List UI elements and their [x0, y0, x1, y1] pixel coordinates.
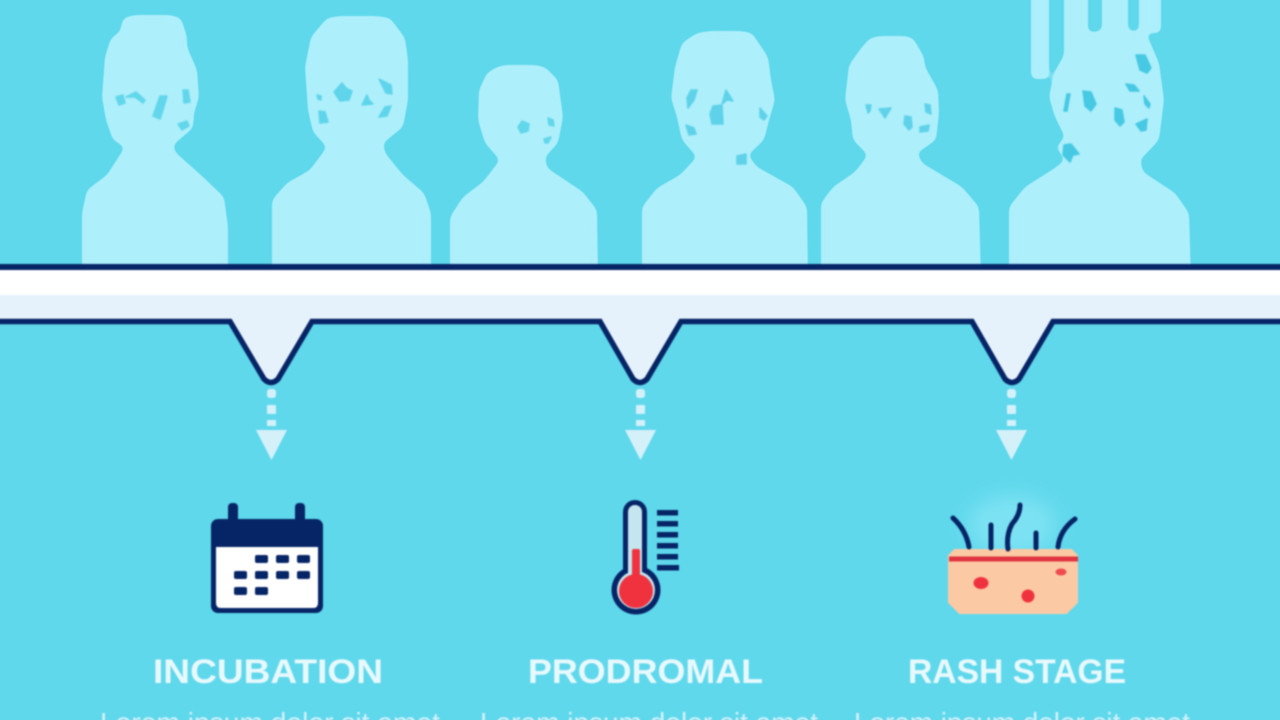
- panel: row of patient silhouettes: [82, 0, 1191, 280]
- heading: prodromal: PRODROMAL: [528, 653, 763, 691]
- timeline band with three notches: [0, 264, 1280, 382]
- icon: thermometer: [612, 500, 679, 614]
- heading: rash stage: RASH STAGE: [908, 653, 1126, 691]
- icon: rash on skin: [949, 495, 1078, 612]
- silhouette: person 5: [821, 36, 981, 280]
- icon: calendar: [211, 503, 323, 613]
- heading: incubation: INCUBATION: [153, 653, 383, 691]
- silhouette: person 3: [450, 65, 598, 280]
- silhouette: person 1: [82, 15, 228, 280]
- arrow: rash stage: [996, 389, 1027, 460]
- arrow: incubation: [256, 389, 287, 460]
- drips and head shape: [1009, 0, 1191, 280]
- arrow: prodromal: [625, 389, 656, 460]
- silhouette: person 6 with drips: [1009, 0, 1191, 280]
- silhouette: person 2: [272, 16, 431, 280]
- silhouette: person 4: [642, 31, 808, 280]
